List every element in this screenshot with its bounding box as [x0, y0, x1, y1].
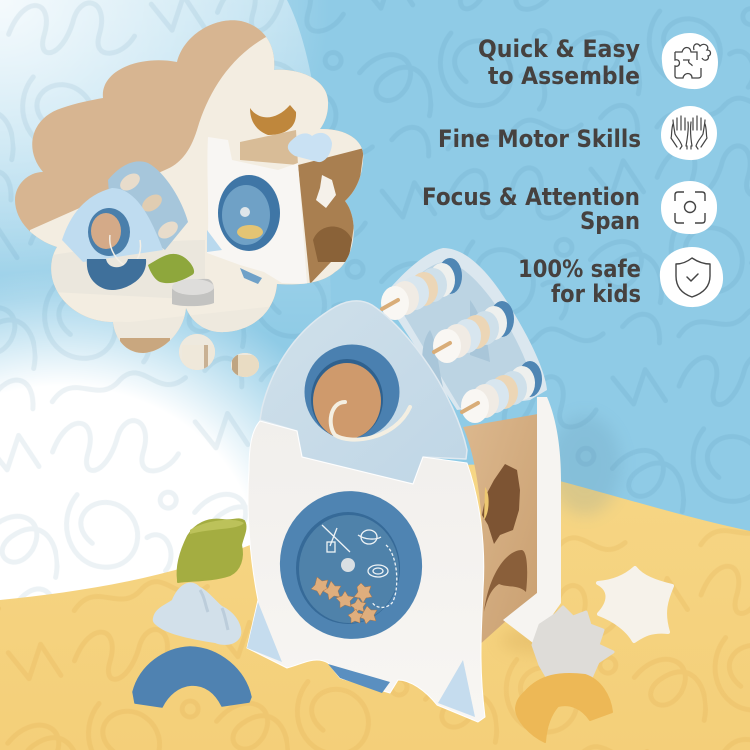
side wood panel [463, 397, 561, 647]
feature: focus and attention: Focus & Attention [422, 183, 640, 211]
icon: puzzle [662, 33, 718, 89]
sand ground [0, 465, 750, 750]
porthole [304, 344, 410, 440]
feature: fine motor skills: Fine Motor Skills [438, 125, 641, 153]
rocket nozzle [328, 664, 390, 693]
feature: safe for kids: 100% safe [518, 255, 641, 283]
large rocket toy in bubble [207, 105, 366, 284]
arch hole [484, 550, 527, 612]
shape: yellow moon [516, 674, 612, 742]
icon: hands [661, 106, 717, 160]
front nose cone [260, 301, 467, 484]
shape: green lemon [178, 519, 246, 582]
feature: focus and attention: Span [580, 207, 640, 235]
thought bubble: toy photo [15, 20, 364, 377]
gear hole [482, 464, 520, 544]
spinner dial [268, 480, 434, 650]
rocket fin right [438, 660, 475, 717]
shape: light blue cloud [153, 583, 241, 645]
shape: blue rainbow arch [133, 647, 251, 707]
feature: focus and attention [422, 181, 717, 235]
shape: grey gear [533, 607, 613, 682]
toy shadow [500, 415, 621, 654]
feature: fine motor skills [438, 106, 717, 160]
feature: quick and easy [478, 33, 718, 90]
rocket toy [247, 248, 561, 722]
icon: focus frame [661, 181, 717, 234]
back nose cone [383, 248, 547, 410]
feature: quick and easy: Quick & Easy [478, 35, 640, 63]
lower white body [247, 421, 485, 722]
feature: safe for kids: for kids [551, 280, 641, 308]
rocket fin left [247, 602, 282, 662]
feature: safe for kids [518, 247, 723, 308]
icon: shield [660, 247, 723, 307]
small rocket toy in bubble [62, 161, 214, 306]
feature: quick and easy: to Assemble [488, 62, 640, 90]
shape: cream star [598, 568, 672, 641]
abacus beads [381, 258, 542, 423]
